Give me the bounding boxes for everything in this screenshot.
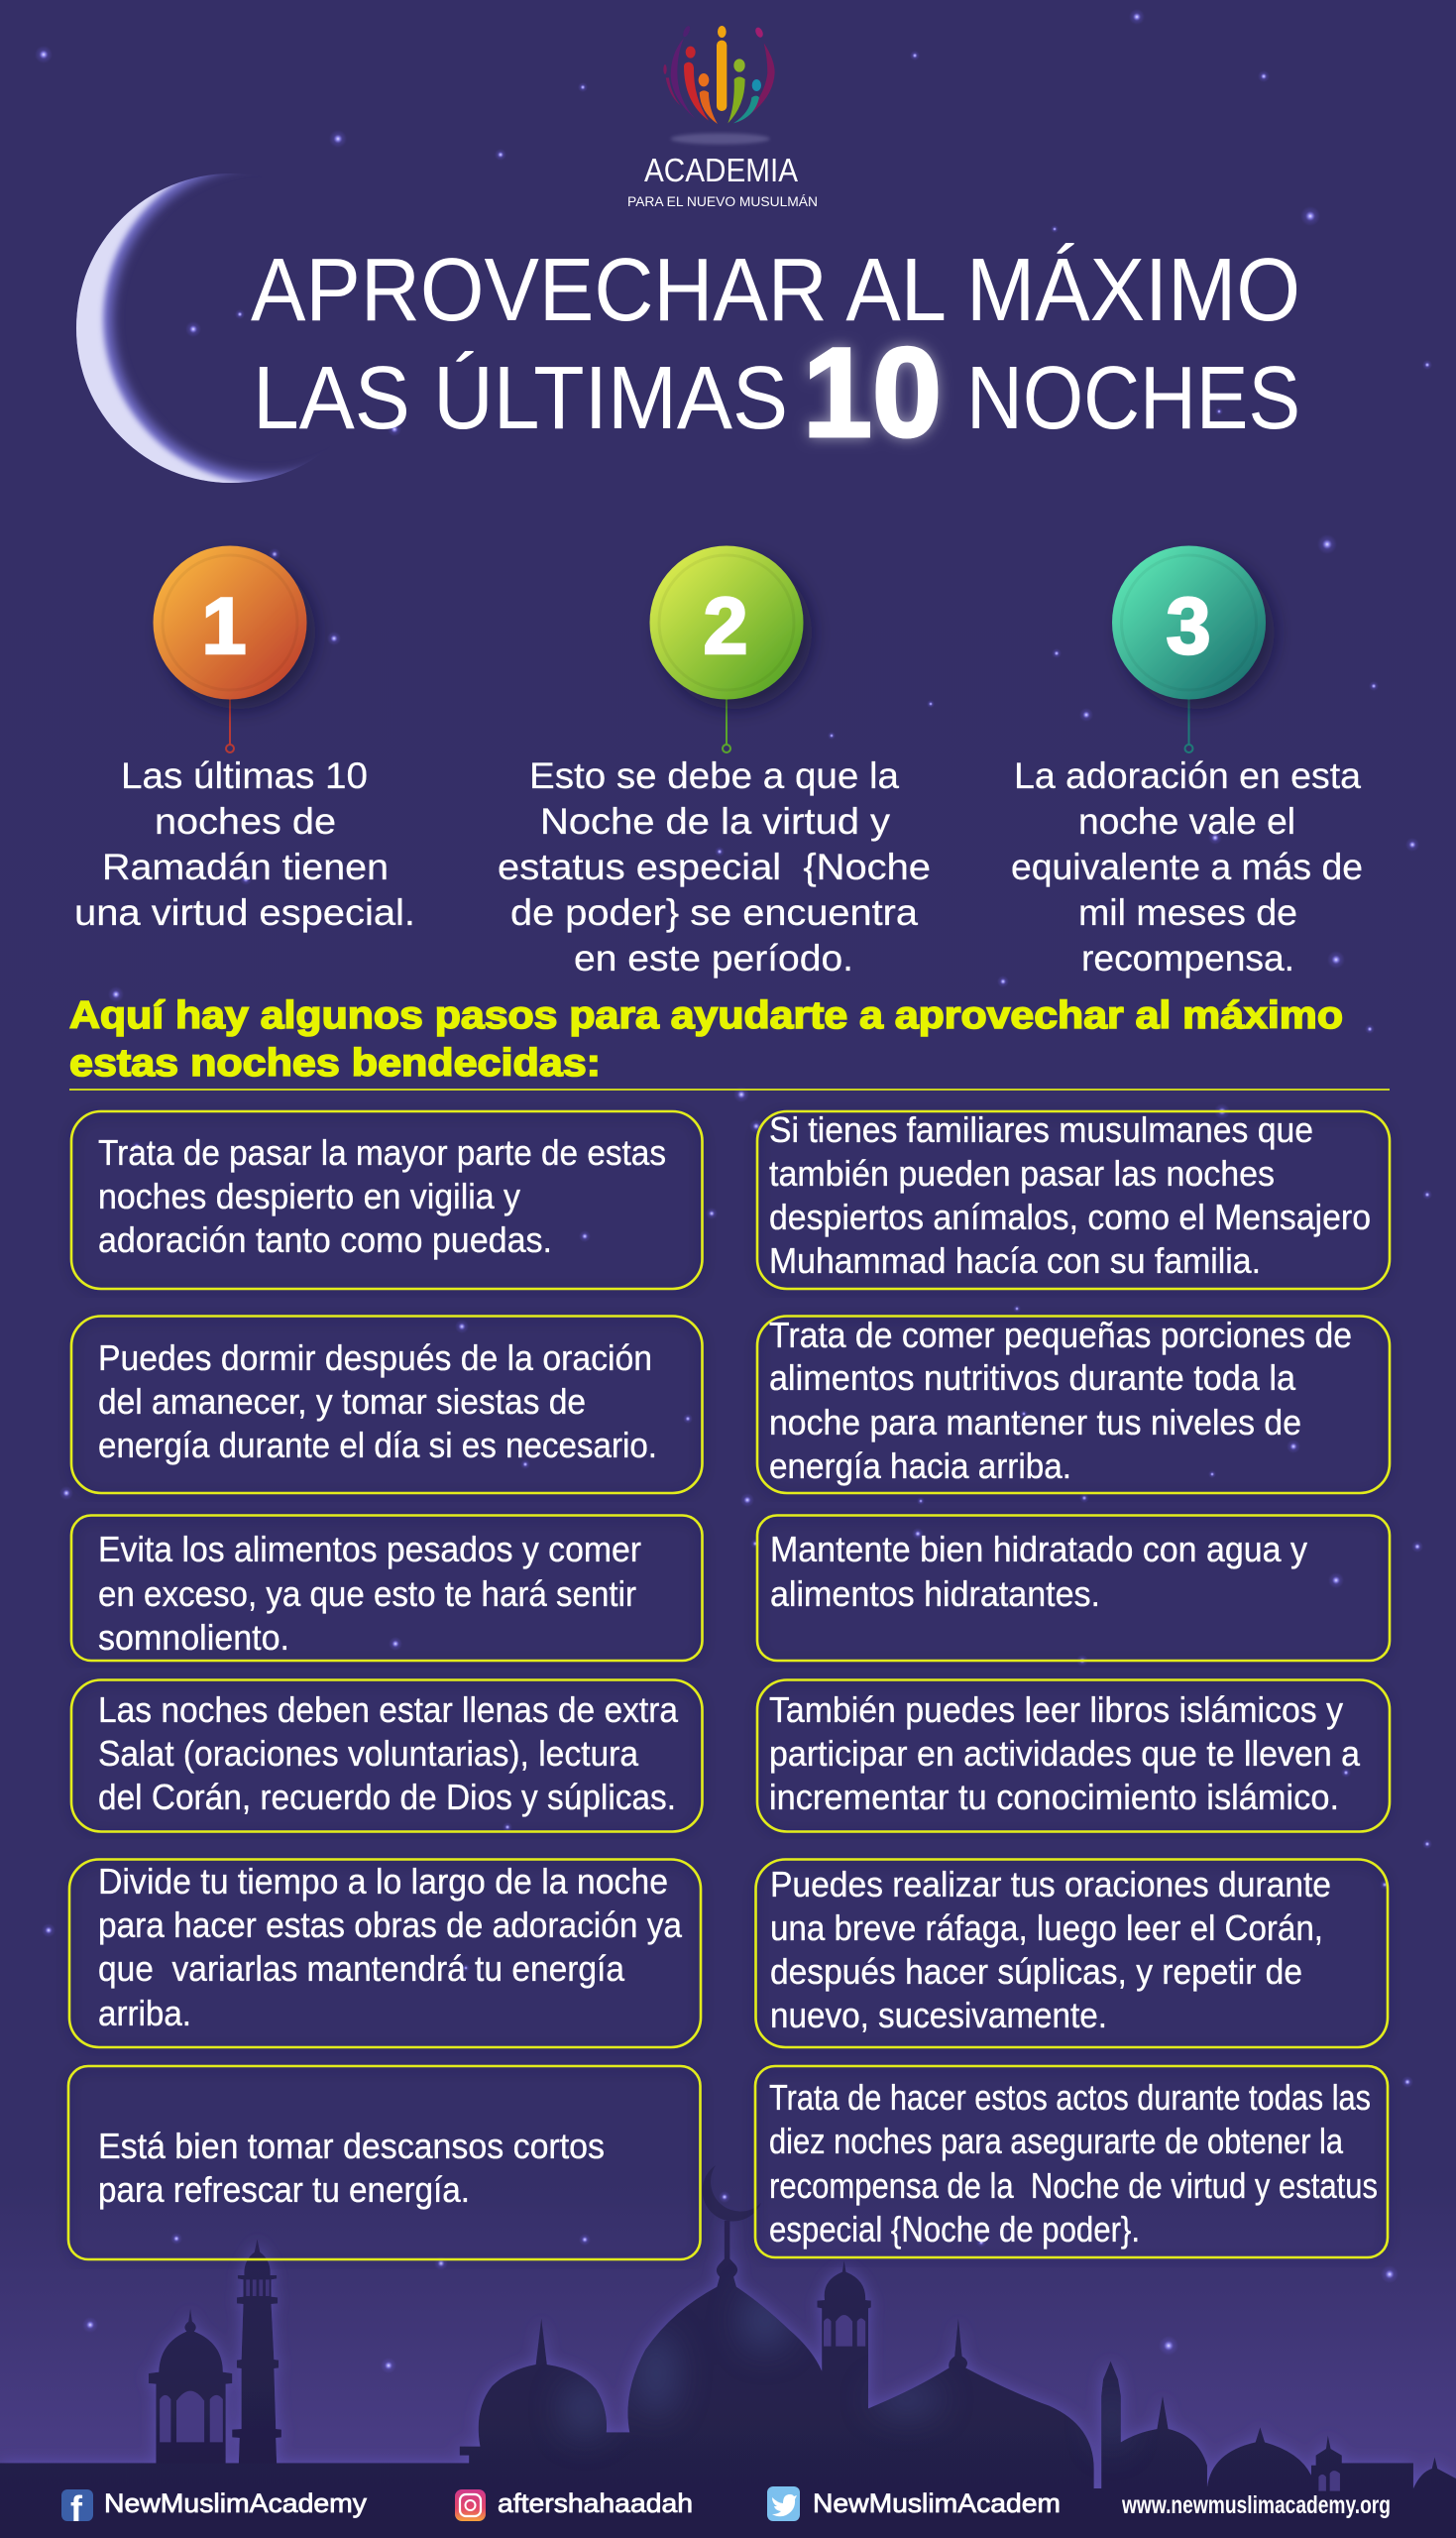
panel: tip left 2: energía durante el día si es necesario. <box>98 1425 657 1465</box>
panel: tip left 1: adoración tanto como puedas. <box>98 1219 552 1260</box>
panel: tip right 5: una breve ráfaga, luego leer el Corán, <box>770 1907 1323 1948</box>
footer: social links <box>61 2486 1391 2529</box>
panel: tip right 2: Trata de comer pequeñas porciones de <box>769 1315 1352 1355</box>
panel: tip right 3 <box>757 1515 1390 1661</box>
panel: tip left 6: para refrescar tu energía. <box>98 2169 470 2210</box>
dome highlights <box>565 2290 1122 2449</box>
panel: tip right 4: También puedes leer libros islámicos y <box>769 1689 1343 1730</box>
badge 2 <box>650 545 803 700</box>
title <box>251 241 1300 464</box>
text 3: equivalente a más de <box>1011 847 1363 887</box>
heading: steps: Aquí hay algunos pasos para ayudarte a aprovechar al máximo <box>69 994 1343 1037</box>
text 2: en este período. <box>574 938 853 979</box>
logo: Academia <box>627 25 818 209</box>
panel: tip left 1 <box>71 1111 702 1289</box>
connector 3 <box>1185 699 1193 752</box>
panel: tip left 5: para hacer estas obras de adoración ya <box>98 1904 683 1945</box>
text 2: Esto se debe a que la <box>529 755 899 796</box>
panel: tip left 5: arriba. <box>98 1993 191 2033</box>
panel: tip left 4: Salat (oraciones voluntarias), lectura <box>98 1733 639 1774</box>
panel: tip left 2: Puedes dormir después de la oración <box>98 1337 652 1378</box>
text 3: La adoración en esta <box>1014 755 1361 796</box>
skyline silhouette <box>0 2221 1456 2538</box>
text 2: estatus especial {Noche <box>498 847 931 887</box>
badge 1 <box>153 545 307 700</box>
panel: tip right 6: recompensa de la Noche de virtud y estatus <box>769 2165 1378 2206</box>
panel: tip right 5: después hacer súplicas, y repetir de <box>770 1951 1302 1992</box>
panel: tip left 5: Divide tu tiempo a lo largo de la noche <box>98 1861 668 1902</box>
text 3 <box>1011 755 1363 979</box>
panel: tip left 2 <box>71 1317 702 1493</box>
text 1: una virtud especial. <box>74 892 415 933</box>
panel: tip left 6 <box>68 2066 700 2259</box>
panel: tip right 3: alimentos hidratantes. <box>770 1573 1100 1614</box>
point 1 <box>74 545 415 933</box>
panel: tip right 6: especial {Noche de poder}. <box>769 2209 1140 2250</box>
panel: tip right 4: incrementar tu conocimiento islámico. <box>769 1777 1339 1817</box>
text 3: recompensa. <box>1081 938 1294 979</box>
title: APROVECHAR AL MÁXIMO <box>251 241 1300 340</box>
panel: tip right 2: noche para mantener tus niveles de <box>769 1402 1301 1442</box>
facebook <box>61 2488 368 2529</box>
panel: tip right 4: participar en actividades que te lleven a <box>769 1733 1361 1774</box>
twitter <box>767 2486 1061 2521</box>
panel: tip left 5 <box>69 1860 701 2047</box>
panel: tip left 3: somnoliento. <box>98 1617 289 1658</box>
twitter: NewMuslimAcadem <box>813 2488 1061 2518</box>
panel: tip left 1: Trata de pasar la mayor parte de estas <box>98 1132 666 1173</box>
skyline windows <box>160 2279 1340 2491</box>
panel: tip right 2: alimentos nutritivos durante toda la <box>769 1357 1296 1398</box>
text 3: mil meses de <box>1078 892 1297 933</box>
panel: tip left 4 <box>71 1679 702 1832</box>
title: 10 <box>803 322 942 464</box>
text 2: Noche de la virtud y <box>540 801 891 842</box>
panel: tip left 3: Evita los alimentos pesados y comer <box>98 1529 641 1569</box>
panel: tip left 4: del Corán, recuerdo de Dios y súplicas. <box>98 1777 676 1817</box>
panel: tip left 1: noches despierto en vigilia y <box>98 1176 520 1216</box>
icon: crescent moon <box>76 173 307 483</box>
panel: tip right 4 <box>757 1679 1390 1832</box>
logo mark: coloured figures <box>663 25 775 145</box>
badge 3 <box>1112 545 1266 700</box>
panel: tip right 2: energía hacia arriba. <box>769 1445 1071 1486</box>
point 2 <box>498 545 931 979</box>
panel: tip right 1 <box>757 1109 1390 1289</box>
text 3: noche vale el <box>1078 801 1295 842</box>
text 1: Ramadán tienen <box>102 847 389 887</box>
panel: tip right 6: diez noches para asegurarte de obtener la <box>769 2121 1344 2161</box>
panel: tip right 6 <box>755 2066 1388 2257</box>
panel: tip right 1: despiertos anímalos, como el Mensajero <box>769 1197 1371 1237</box>
panel: tip left 6: Está bien tomar descansos cortos <box>98 2126 605 2166</box>
panel: tip right 5 <box>755 1860 1388 2047</box>
panel: tip right 1: Muhammad hacía con su familia. <box>769 1240 1261 1281</box>
instagram: aftershahaadah <box>498 2488 693 2518</box>
panel: tip right 3: Mantente bien hidratado con agua y <box>770 1529 1307 1569</box>
badge 2: 2 <box>703 582 748 671</box>
text 2: de poder} se encuentra <box>510 892 918 933</box>
badge 1: 1 <box>201 582 247 671</box>
panel: tip left 3 <box>71 1515 702 1661</box>
text 1: noches de <box>155 801 336 842</box>
panel: tip left 5: que variarlas mantendrá tu energía <box>98 1948 625 1989</box>
title: NOCHES <box>966 349 1300 448</box>
point 3 <box>1011 545 1363 979</box>
heading: steps: estas noches bendecidas: <box>69 1042 601 1085</box>
text 2 <box>498 755 931 979</box>
heading: steps <box>69 994 1343 1085</box>
panel: tip right 2 <box>757 1315 1390 1493</box>
panel: tip right 1: Si tienes familiares musulmanes que <box>769 1109 1313 1150</box>
panel: tip left 3: en exceso, ya que esto te hará sentir <box>98 1573 636 1614</box>
panel: tip right 5: nuevo, sucesivamente. <box>770 1995 1107 2035</box>
panel: tip right 5: Puedes realizar tus oraciones durante <box>770 1864 1331 1904</box>
icon: mosque crescent <box>703 2165 761 2221</box>
connector 1 <box>226 699 234 752</box>
badge 3: 3 <box>1166 582 1211 671</box>
panel: tip right 6: Trata de hacer estos actos durante todas las <box>769 2077 1371 2118</box>
logo wordmark: ACADEMIA <box>644 152 798 188</box>
connector 2 <box>723 699 730 752</box>
text 1 <box>74 755 415 933</box>
panel: tip right 1: también pueden pasar las noches <box>769 1153 1275 1194</box>
logo tagline: PARA EL NUEVO MUSULMÁN <box>627 194 818 209</box>
facebook: f <box>70 2488 83 2529</box>
panel: tip left 4: Las noches deben estar llenas de extra <box>98 1689 679 1730</box>
facebook: NewMuslimAcademy <box>104 2488 368 2518</box>
title: LAS ÚLTIMAS <box>253 349 788 448</box>
text 1: Las últimas 10 <box>121 755 368 796</box>
panel: tip left 2: del amanecer, y tomar siestas de <box>98 1381 586 1422</box>
